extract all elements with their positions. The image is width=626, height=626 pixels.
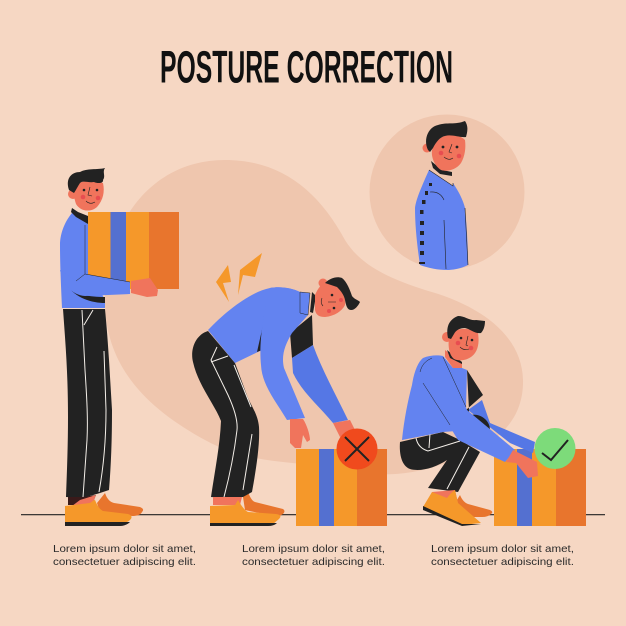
hand — [131, 278, 158, 297]
trousers — [192, 331, 259, 498]
box — [296, 449, 387, 526]
far arm — [292, 345, 348, 423]
head — [310, 277, 360, 317]
black chest lining — [466, 370, 490, 430]
head — [68, 168, 105, 224]
caption 1 — [53, 543, 196, 568]
front shoe — [423, 490, 481, 526]
near hand — [290, 419, 310, 448]
caption 2 — [242, 543, 385, 568]
figure: bending man, bad posture — [192, 253, 387, 526]
far hand — [333, 420, 355, 437]
shirt — [415, 170, 468, 270]
box — [494, 449, 586, 526]
collar — [300, 292, 310, 315]
pain lightning bolts — [216, 253, 262, 302]
caption 3: Lorem ipsum dolor sit amet, — [431, 543, 574, 555]
far arm — [468, 400, 535, 453]
hand — [506, 450, 538, 478]
head — [422, 121, 467, 176]
background circle — [370, 114, 524, 270]
front shoe — [210, 497, 280, 526]
shirt fold lines — [420, 357, 466, 425]
trousers — [400, 432, 480, 492]
head — [442, 316, 485, 368]
caption 1: Lorem ipsum dolor sit amet, — [53, 543, 196, 555]
shirt torso — [60, 213, 105, 308]
figure: squatting man, good posture — [400, 316, 586, 526]
trousers — [63, 309, 112, 498]
spine markers — [419, 183, 432, 264]
caption 2: Lorem ipsum dolor sit amet, — [242, 543, 385, 555]
caption 3: consectetuer adipiscing elit. — [431, 556, 574, 568]
front shoe — [65, 495, 132, 526]
near arm — [260, 287, 308, 420]
near arm — [421, 357, 515, 462]
background blob — [105, 160, 523, 474]
shirt torso — [402, 355, 470, 440]
caption 1: consectetuer adipiscing elit. — [53, 556, 196, 568]
shirt torso — [208, 287, 313, 363]
figure: standing man with box — [60, 168, 179, 526]
back shoe — [97, 493, 143, 516]
figure: posture detail in circle — [415, 121, 468, 270]
correct mark — [534, 428, 576, 469]
wrong mark — [336, 428, 378, 470]
back shoe — [243, 492, 284, 517]
box — [88, 212, 179, 289]
caption 2: consectetuer adipiscing elit. — [242, 556, 385, 568]
arm outline — [76, 225, 130, 282]
caption 3 — [431, 543, 574, 568]
ground line — [21, 514, 605, 516]
arm — [60, 270, 130, 296]
back shoe — [440, 495, 492, 517]
